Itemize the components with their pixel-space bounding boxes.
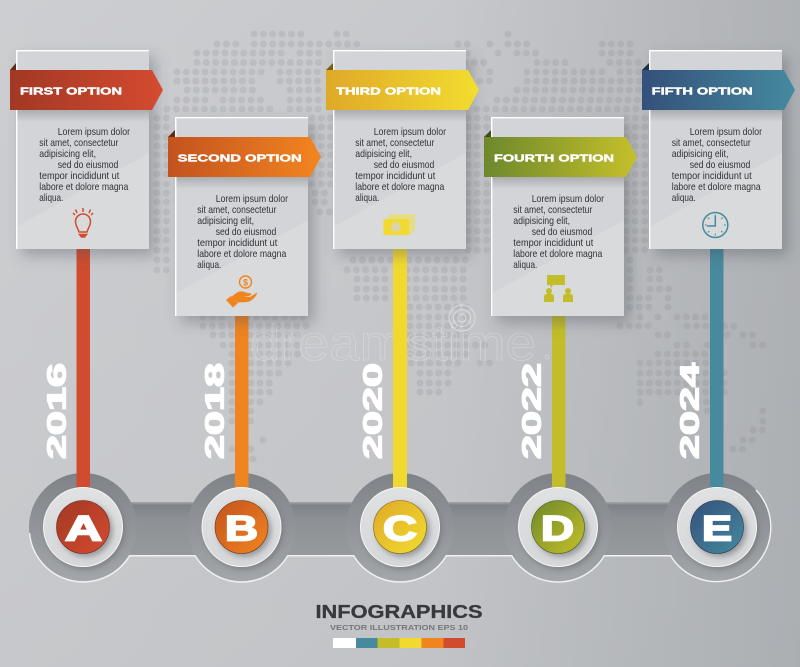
text block: first option: aliqua. bbox=[39, 193, 63, 204]
text block: first option: tempor incididunt ut bbox=[39, 171, 119, 182]
panel: second option bbox=[168, 117, 321, 316]
text block: second option: tempor incididunt ut bbox=[197, 238, 277, 249]
text block: second option: Lorem ipsum dolor bbox=[216, 194, 288, 205]
text block: fifth option: sed do eiusmod bbox=[690, 160, 750, 171]
text block: third option: aliqua. bbox=[355, 193, 379, 204]
connector bars bbox=[76, 249, 724, 490]
text block: fourth option bbox=[513, 194, 604, 271]
text block: fourth option: sit amet, consectetur bbox=[513, 205, 593, 216]
text block: fifth option: labore et dolore magna bbox=[672, 182, 761, 193]
ribbon: third option bbox=[326, 70, 479, 110]
timeline node discs bbox=[29, 473, 771, 582]
text block: second option: adipisicing elit, bbox=[197, 216, 254, 227]
text block: fifth option bbox=[672, 127, 762, 204]
text block: second option: sit amet, consectetur bbox=[197, 205, 277, 216]
text block: fourth option: aliqua. bbox=[513, 260, 537, 271]
footer subtitle: VECTOR ILLUSTRATION EPS 10 bbox=[330, 623, 468, 632]
year labels: 2018 bbox=[200, 363, 230, 459]
ribbon: fourth option: FOURTH OPTION bbox=[494, 152, 614, 164]
text block: second option: aliqua. bbox=[197, 260, 221, 271]
text block: second option bbox=[197, 194, 288, 271]
icon: clock bbox=[703, 212, 728, 238]
text block: second option: sed do eiusmod bbox=[216, 227, 276, 238]
node A bbox=[44, 488, 122, 566]
colour strip legend bbox=[333, 638, 465, 648]
text block: second option: labore et dolore magna bbox=[197, 249, 286, 260]
connector band bbox=[100, 502, 720, 556]
text block: fourth option: sed do eiusmod bbox=[532, 227, 592, 238]
world map dots bbox=[157, 34, 764, 459]
ribbon: second option bbox=[168, 137, 321, 177]
text block: fifth option: sit amet, consectetur bbox=[672, 138, 751, 149]
icon: banknotes bbox=[384, 214, 415, 235]
text block: third option: Lorem ipsum dolor bbox=[374, 127, 446, 138]
ribbon: third option: THIRD OPTION bbox=[336, 85, 441, 97]
text block: fifth option: adipisicing elit, bbox=[672, 149, 728, 160]
text block: fifth option: Lorem ipsum dolor bbox=[690, 127, 762, 138]
text block: fourth option: tempor incididunt ut bbox=[513, 238, 593, 249]
text block: third option bbox=[355, 127, 446, 204]
icon: light bulb bbox=[73, 208, 93, 237]
node E bbox=[678, 488, 756, 566]
ribbon: first option bbox=[10, 70, 163, 110]
ribbon: first option: FIRST OPTION bbox=[20, 85, 122, 97]
text block: fourth option: labore et dolore magna bbox=[513, 249, 602, 260]
text block: first option: sed do eiusmod bbox=[58, 160, 118, 171]
year labels: 2020 bbox=[358, 363, 388, 459]
text block: third option: labore et dolore magna bbox=[355, 182, 444, 193]
panel: fourth option bbox=[484, 117, 637, 316]
year labels bbox=[42, 362, 704, 459]
text block: first option: Lorem ipsum dolor bbox=[58, 127, 130, 138]
year labels: 2016 bbox=[42, 363, 72, 459]
node E: E bbox=[702, 510, 732, 548]
text block: third option: tempor incididunt ut bbox=[355, 171, 435, 182]
panel: third option bbox=[326, 50, 479, 249]
icon: hand with coin bbox=[226, 276, 257, 308]
text block: fourth option: adipisicing elit, bbox=[513, 216, 570, 227]
year labels: 2022 bbox=[516, 363, 546, 459]
text block: first option: adipisicing elit, bbox=[39, 149, 96, 160]
node A: A bbox=[65, 510, 102, 548]
footer title: INFOGRAPHICS bbox=[316, 602, 482, 622]
text block: first option bbox=[39, 127, 130, 204]
text block: third option: sit amet, consectetur bbox=[355, 138, 435, 149]
text block: fifth option: tempor incididunt ut bbox=[672, 171, 752, 182]
watermark: dreamstime bbox=[250, 315, 536, 371]
ribbon: fourth option bbox=[484, 137, 637, 177]
ribbon: second option: SECOND OPTION bbox=[178, 152, 302, 164]
icon: hand with coin: $ bbox=[243, 278, 248, 288]
node B bbox=[202, 488, 281, 566]
panel: fifth option bbox=[642, 50, 795, 249]
text block: third option: sed do eiusmod bbox=[374, 160, 434, 171]
node D: D bbox=[541, 510, 574, 548]
text block: fourth option: Lorem ipsum dolor bbox=[532, 194, 604, 205]
ribbon: fifth option bbox=[642, 70, 795, 110]
node C: C bbox=[383, 510, 417, 548]
text block: first option: labore et dolore magna bbox=[39, 182, 128, 193]
node B: B bbox=[225, 510, 258, 548]
node C bbox=[360, 488, 440, 566]
icon: two people chatting bbox=[544, 275, 573, 302]
text block: first option: sit amet, consectetur bbox=[39, 138, 119, 149]
text block: third option: adipisicing elit, bbox=[355, 149, 412, 160]
node D bbox=[518, 488, 598, 566]
year labels: 2024 bbox=[674, 362, 704, 459]
text block: fifth option: aliqua. bbox=[672, 193, 696, 204]
panel: first option bbox=[10, 50, 163, 249]
ribbon: fifth option: FIFTH OPTION bbox=[652, 85, 753, 97]
